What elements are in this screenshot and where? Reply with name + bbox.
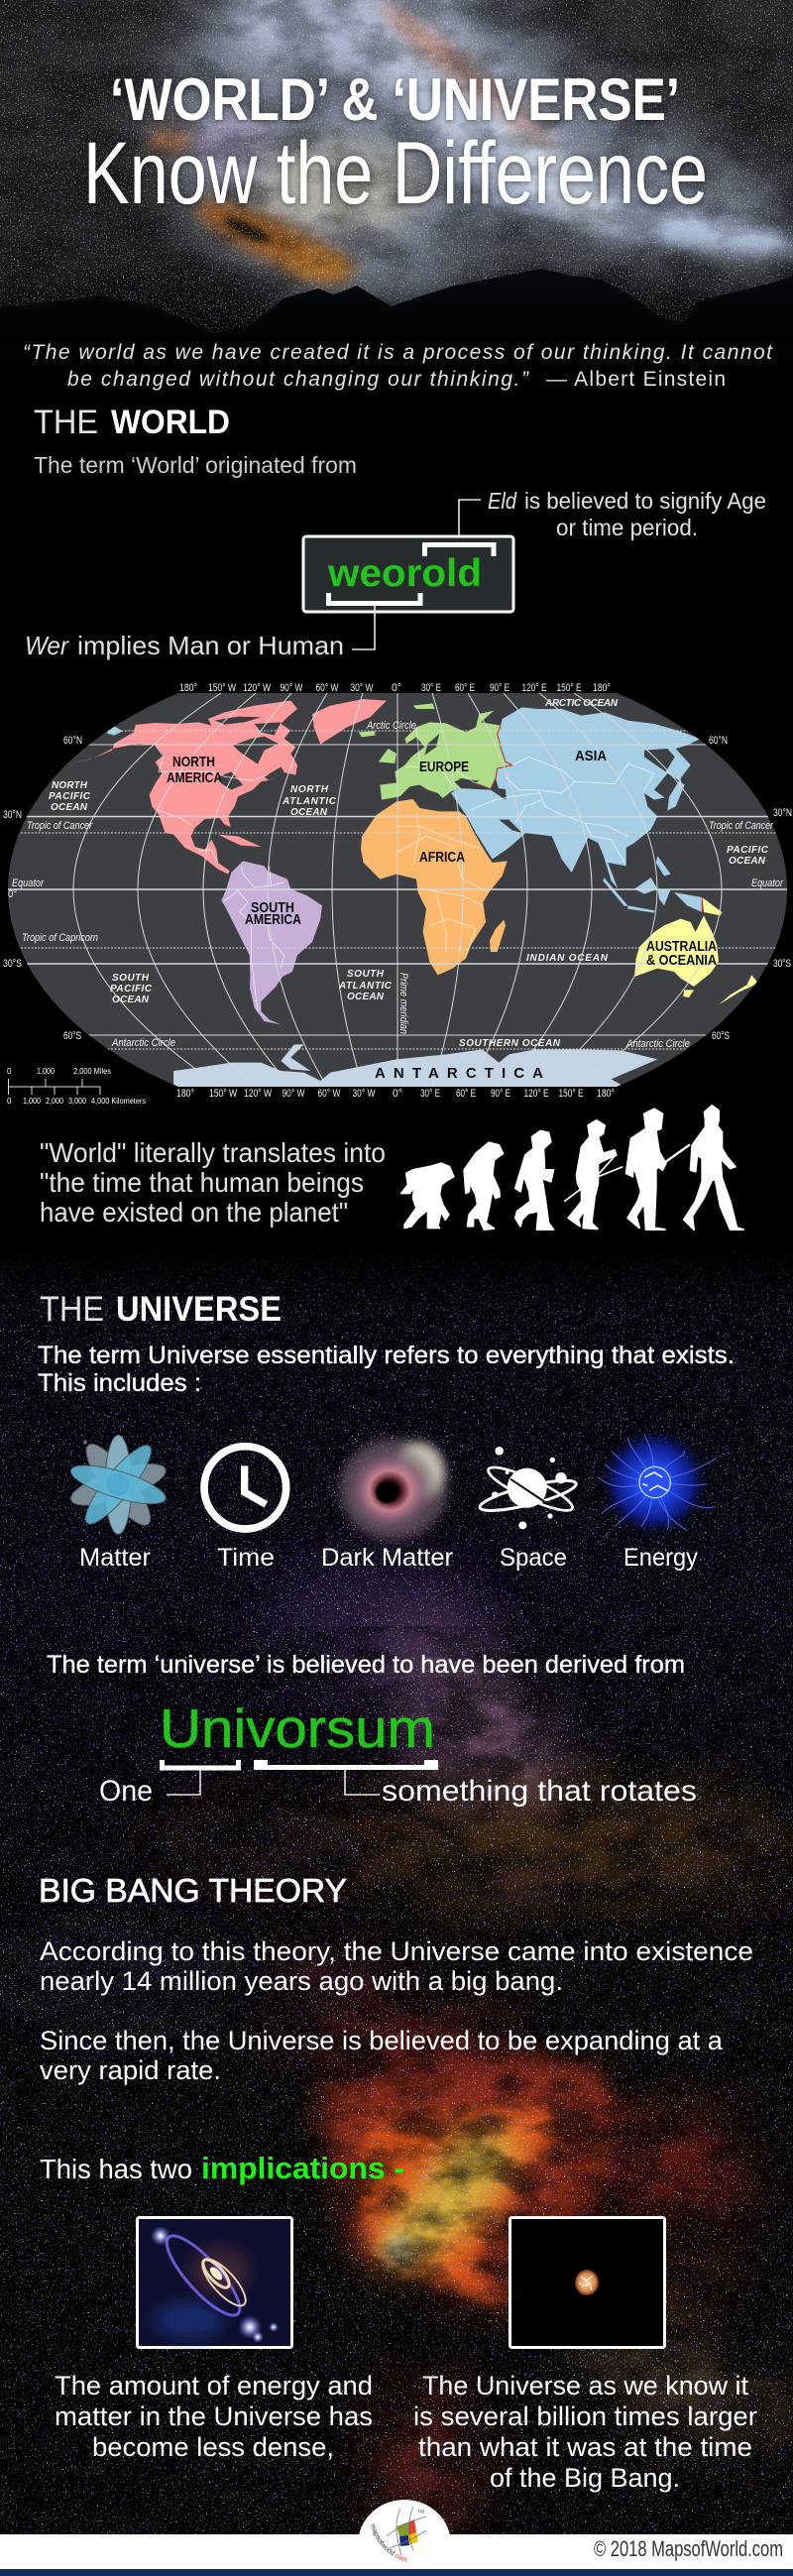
map top axis labels: 120° E <box>521 682 547 694</box>
title: ‘WORLD’ & ‘UNIVERSE’ <box>110 66 680 133</box>
latitude labels: 60°N <box>709 735 728 747</box>
mountain silhouette <box>0 269 793 377</box>
ocean labels: OCEAN <box>112 995 150 1005</box>
logo: mapsofworld.com <box>371 2524 406 2562</box>
text: big bang description: Since then, the Universe is believed to be expanding at a <box>40 2026 724 2055</box>
map bottom axis labels: 90° W <box>282 1088 305 1100</box>
quote: be changed without changing our thinking.” <box>67 368 529 391</box>
icon labels: Dark Matter <box>321 1544 453 1572</box>
icon labels: Energy <box>623 1544 698 1572</box>
icon labels <box>79 1544 698 1572</box>
ocean labels: OCEAN <box>729 856 766 867</box>
latitude labels: 30°N <box>3 809 22 821</box>
ocean labels: INDIAN OCEAN <box>526 953 609 964</box>
icon labels: Matter <box>79 1544 151 1572</box>
heading: implications <box>40 2151 404 2185</box>
latitude labels: 30°S <box>3 958 22 970</box>
continent labels: AMERICA <box>167 769 222 786</box>
map top axis labels: 120° W <box>243 682 271 694</box>
map top axis labels: 30° E <box>421 682 441 694</box>
ocean labels: OCEAN <box>51 802 88 813</box>
text: implication two: The Universe as we know it <box>422 2371 748 2400</box>
ocean labels: PACIFIC <box>49 791 91 802</box>
icon labels: Time <box>217 1544 275 1572</box>
map bottom axis labels: 30° W <box>353 1088 376 1100</box>
text: implication two <box>413 2371 757 2493</box>
continent labels: EUROPE <box>419 759 469 775</box>
ocean labels: NORTH <box>290 784 329 795</box>
circle and tropic labels: Equator <box>751 878 784 889</box>
continent labels: ANTARCTICA <box>375 1065 543 1082</box>
map scale bar: 4,000 Kilometers <box>91 1097 146 1106</box>
text: implication one: matter in the Universe has <box>55 2401 373 2431</box>
text: universe definition: The term Universe essentially refers to everything that exists. <box>38 1342 735 1369</box>
universe starfield background <box>0 1244 793 2534</box>
map bottom axis labels: 150° E <box>559 1088 583 1100</box>
map scale bar: 1,000 <box>23 1097 41 1106</box>
circle and tropic labels: Tropic of Capricorn <box>22 932 98 944</box>
map top axis labels: 60° E <box>455 682 475 694</box>
continent labels: & OCEANIA <box>646 952 717 969</box>
callout: eld meaning <box>459 488 766 541</box>
map bottom axis labels: 180° <box>176 1088 194 1100</box>
map bottom axis labels: 0° <box>393 1088 402 1100</box>
ocean labels: OCEAN <box>290 807 328 818</box>
heading: the universe: UNIVERSE <box>116 1290 282 1329</box>
text: big bang description: nearly 14 million years ago with a big bang. <box>40 1966 563 1996</box>
map scale bar <box>7 1067 146 1106</box>
logo: TM <box>417 2510 424 2516</box>
text: implication one: become less dense, <box>92 2432 334 2462</box>
text: world translation: have existed on the planet" <box>40 1197 348 1228</box>
circle and tropic labels: Antarctic Circle <box>625 1038 690 1050</box>
header galaxy background <box>0 0 793 347</box>
quote: “The world as we have created it is a process of our thinking. It cannot <box>23 341 773 364</box>
latitude labels: 60°S <box>712 1030 730 1042</box>
map top axis labels: 30° W <box>351 682 374 694</box>
text: implication one <box>55 2371 373 2462</box>
circle and tropic labels <box>12 720 784 1050</box>
continent labels: AFRICA <box>419 849 465 866</box>
text: term world origin: The term ‘World’ originated from <box>34 452 357 478</box>
map scale bar: 2,000 Miles <box>73 1067 111 1076</box>
heading: the world: WORLD <box>111 404 230 441</box>
callout: wer meaning: Wer <box>25 631 69 660</box>
callout: wer meaning <box>25 606 375 660</box>
map scale bar: 1,000 <box>37 1067 55 1076</box>
map bottom axis labels: 30° E <box>420 1088 440 1100</box>
text: implication two: than what it was at the time <box>418 2432 752 2462</box>
callout: one: One <box>99 1775 153 1808</box>
word: univorsum: Univorsum <box>160 1698 435 1759</box>
map bottom axis labels: 60° E <box>456 1088 476 1100</box>
latitude labels: 0° <box>8 888 17 900</box>
ocean labels: SOUTH <box>112 973 150 984</box>
icon: matter <box>66 1435 170 1534</box>
heading: the universe: THE <box>40 1290 104 1329</box>
title <box>83 66 708 222</box>
text: world translation <box>40 1137 386 1228</box>
map bottom axis labels: 150° W <box>209 1088 237 1100</box>
circle and tropic labels: Tropic of Cancer <box>27 820 93 832</box>
callout: one <box>99 1770 200 1808</box>
map top axis labels: 180° <box>179 682 197 694</box>
map bottom axis labels: 60° W <box>317 1088 341 1100</box>
map scale bar: 3,000 <box>68 1097 86 1106</box>
heading: the world <box>34 404 230 441</box>
map top axis labels: 90° E <box>490 682 510 694</box>
icon: human evolution <box>401 1106 743 1229</box>
image: tiny early universe <box>510 2217 664 2348</box>
map ocean <box>8 693 787 1087</box>
graticule <box>0 693 793 1087</box>
ocean labels: ATLANTIC <box>282 796 337 807</box>
circle and tropic labels: Prime meridian <box>397 973 409 1034</box>
circle and tropic labels: Antarctic Circle <box>111 1037 175 1049</box>
heading: big bang theory: BIG BANG THEORY <box>39 1872 347 1909</box>
circle and tropic labels: Arctic Circle <box>366 720 416 732</box>
latitude labels: 60°S <box>63 1030 81 1042</box>
circle and tropic labels: Tropic of Cancer <box>709 820 774 832</box>
word box: weorold: weorold <box>327 552 482 595</box>
map top axis labels <box>179 682 611 694</box>
map scale bar: 2,000 <box>46 1097 63 1106</box>
ocean labels: NORTH <box>52 780 88 791</box>
map scale bar: 0 <box>7 1067 12 1076</box>
map bottom axis labels: 180° <box>597 1088 615 1100</box>
text: world translation: "the time that human beings <box>40 1167 364 1198</box>
quote: — Albert Einstein <box>546 368 726 391</box>
word box: weorold <box>303 536 513 612</box>
continent labels: SOUTH <box>251 899 294 916</box>
text: big bang description: According to this theory, the Universe came into existence <box>40 1936 753 1966</box>
heading: the world: THE <box>34 404 98 441</box>
text: universe derivation: The term ‘universe’ is believed to have been derived from <box>47 1651 685 1679</box>
continent labels: AUSTRALIA <box>646 938 717 955</box>
icon: clock <box>204 1447 286 1529</box>
ocean labels: SOUTHERN OCEAN <box>459 1038 561 1049</box>
text: universe definition: This includes : <box>38 1369 201 1397</box>
text: implication two: of the Big Bang. <box>490 2463 680 2493</box>
antarctica <box>173 1044 657 1087</box>
heading: the universe <box>40 1290 282 1329</box>
icon: energy plasma <box>597 1425 717 1540</box>
continents east <box>361 703 758 1004</box>
text: implication one: The amount of energy and <box>55 2371 373 2400</box>
map bottom axis labels <box>176 1088 615 1100</box>
ocean labels: PACIFIC <box>110 984 153 995</box>
text: world translation: "World" literally translates into <box>40 1137 386 1168</box>
text: big bang description <box>40 1936 753 2085</box>
ocean labels: SOUTH <box>347 969 385 980</box>
world map <box>3 683 791 1105</box>
map top axis labels: 90° W <box>280 682 303 694</box>
callout: something that rotates: something that rotates <box>382 1775 697 1808</box>
ocean labels: OCEAN <box>347 992 385 1002</box>
ocean labels <box>49 698 769 1049</box>
map top axis labels: 180° <box>593 682 611 694</box>
heading: implications: implications - <box>201 2151 404 2185</box>
map bottom axis labels: 120° W <box>244 1088 272 1100</box>
footer <box>0 2500 793 2576</box>
continent labels <box>167 748 717 1082</box>
icon: space planet <box>478 1447 578 1529</box>
text: big bang description: very rapid rate. <box>40 2055 221 2085</box>
callout: eld meaning: or time period. <box>556 515 698 540</box>
icon: dark matter black hole <box>339 1438 448 1540</box>
map top axis labels: 0° <box>392 682 401 694</box>
ocean labels: ARCTIC OCEAN <box>544 698 619 709</box>
continent labels: AMERICA <box>245 911 301 928</box>
ocean labels: PACIFIC <box>727 845 769 856</box>
quote <box>23 341 773 391</box>
text: implication two: is several billion times larger <box>413 2401 757 2431</box>
callout: eld meaning: is believed to signify Age <box>524 488 766 514</box>
heading: implications: This has two <box>40 2154 192 2184</box>
ocean labels: ATLANTIC <box>338 981 393 992</box>
map scale bar: 0 <box>7 1097 12 1106</box>
continent labels: NORTH <box>172 754 215 770</box>
callout: eld meaning: Eld <box>488 488 517 514</box>
logo <box>359 2500 450 2562</box>
continents west <box>66 699 387 1024</box>
text: universe definition <box>38 1342 735 1397</box>
image: spiral galaxy <box>137 2217 291 2348</box>
latitude labels: 60°N <box>63 735 82 747</box>
circle and tropic labels: Equator <box>12 878 45 889</box>
map bottom axis labels: 120° E <box>523 1088 549 1100</box>
map top axis labels: 150° E <box>557 682 581 694</box>
map bottom axis labels: 90° E <box>491 1088 510 1100</box>
icon labels: Space <box>500 1544 567 1572</box>
map top axis labels: 150° W <box>208 682 236 694</box>
callout: wer meaning: implies Man or Human <box>77 631 344 660</box>
latitude labels <box>3 735 792 1042</box>
continent labels: ASIA <box>575 748 607 764</box>
map top axis labels: 60° W <box>315 682 339 694</box>
